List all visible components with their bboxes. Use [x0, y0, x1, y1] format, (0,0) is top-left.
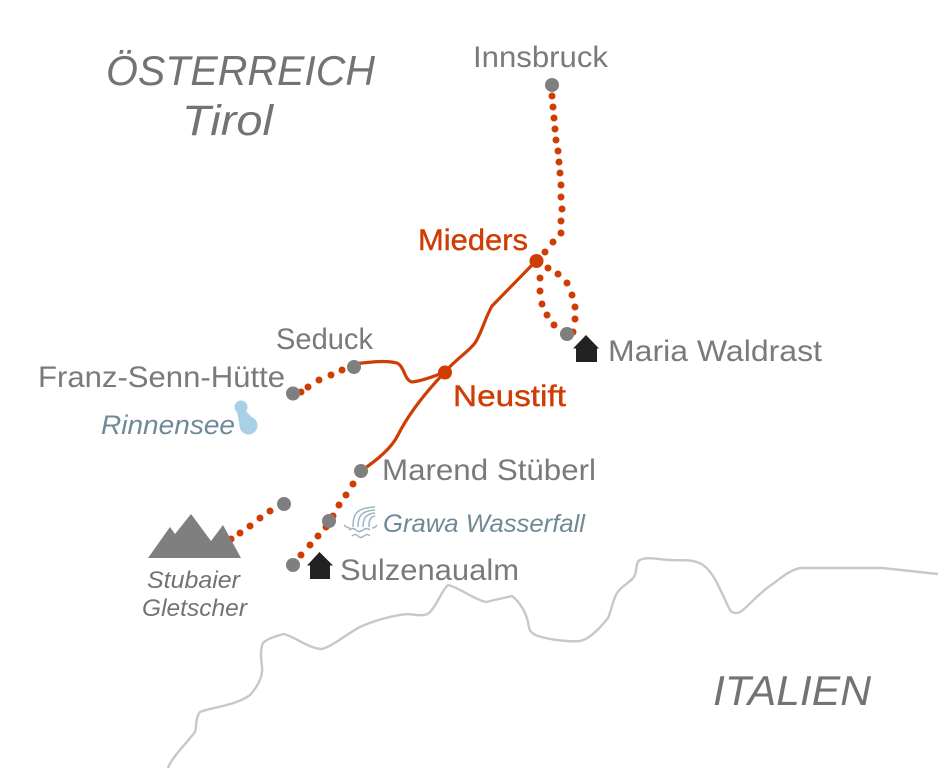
- dotted route: Innsbruck to Mieders: [542, 92, 566, 256]
- dotted loop: Mieders to Maria Waldrast: [536, 264, 578, 336]
- stop: Mieders marker: [530, 254, 544, 268]
- label: Mieders: Mieders: [418, 224, 528, 257]
- label: Stubaier Gletscher: [142, 567, 248, 622]
- labels: grey places: Innsbruck: [473, 41, 609, 74]
- label: Grawa Wasserfall: Grawa Wasserfall: [383, 510, 586, 538]
- label: Stubaier Gletscher: Gletscher: [142, 595, 248, 622]
- icon: lake: [234, 400, 258, 434]
- stops: [277, 78, 574, 572]
- icon: house Sulzenaualm: [307, 552, 333, 579]
- icon: waterfall: [344, 507, 377, 538]
- title: Österreich Tirol: Tirol: [182, 97, 275, 145]
- label: Stubaier Gletscher: Stubaier: [147, 567, 241, 594]
- icon: house Maria Waldrast: [573, 335, 599, 362]
- labels: grey places: [38, 41, 823, 587]
- label: Italien: ITALIEN: [713, 667, 872, 714]
- dotted route: Marend Stüberl to Sulzenaualm: [298, 480, 356, 558]
- labels: grey places: Maria Waldrast: [608, 335, 823, 368]
- label: Rinnensee: Rinnensee: [101, 410, 235, 440]
- title: Österreich Tirol: [106, 47, 376, 145]
- icon: mountains: [148, 514, 241, 558]
- solid route: Mieders to Marend Stüberl: [361, 261, 536, 471]
- dotted route: Seduck to Franz-Senn-Hütte: [298, 366, 346, 396]
- title: Österreich Tirol: ÖSTERREICH: [106, 47, 376, 94]
- labels: grey places: Sulzenaualm: [340, 554, 519, 587]
- solid route: Neustift to Seduck: [354, 361, 445, 382]
- labels: grey places: Marend Stüberl: [382, 454, 596, 487]
- dotted route: to Stubaier Gletscher: [228, 508, 274, 542]
- border line: [168, 558, 938, 768]
- labels: grey places: Franz-Senn-Hütte: [38, 361, 285, 394]
- label: Neustift: Neustift: [453, 380, 567, 413]
- stop: Neustift marker: [438, 366, 452, 380]
- labels: grey places: Seduck: [276, 323, 374, 356]
